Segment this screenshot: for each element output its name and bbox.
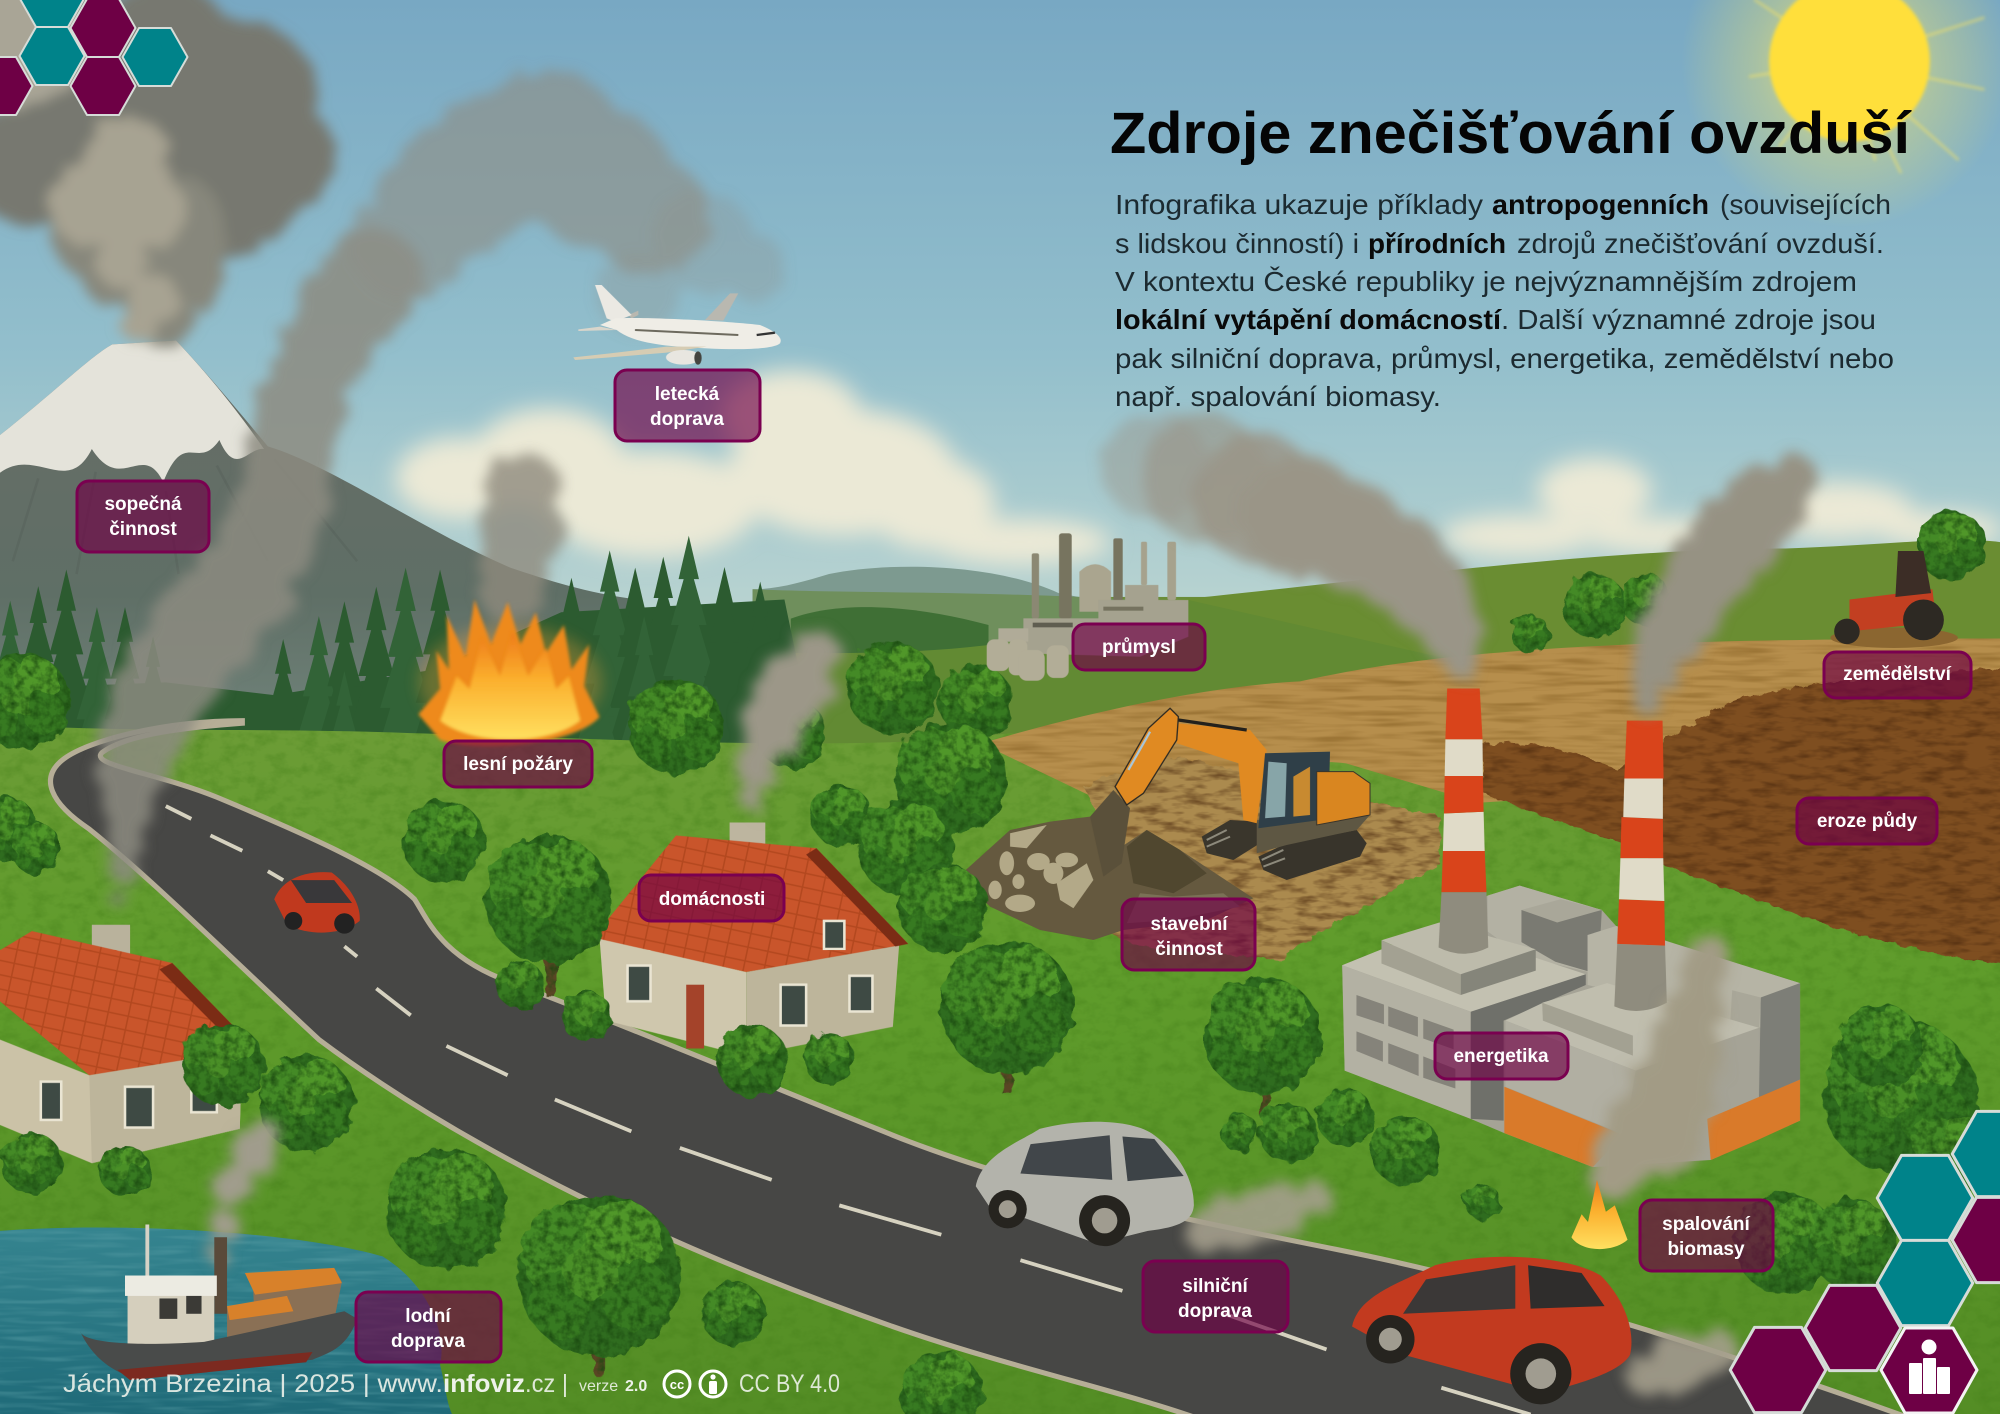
footer credit: CC BY 4.0 bbox=[739, 1370, 840, 1398]
lake bbox=[0, 1227, 453, 1414]
house: left bbox=[0, 925, 255, 1163]
volcano snow cap bbox=[0, 341, 264, 482]
right block back bbox=[1587, 926, 1800, 1028]
road bbox=[51, 721, 1939, 1414]
left block front wall bbox=[1342, 965, 1471, 1119]
refinery tank bbox=[1079, 564, 1111, 612]
silver car bbox=[976, 1122, 1194, 1246]
intro text: zdrojů znečišťování ovzduší. bbox=[1517, 228, 1884, 259]
label: lesní požáry: lesní požáry bbox=[463, 754, 573, 775]
label: stavební činnost: činnost bbox=[1155, 939, 1223, 960]
right block front wall bbox=[1505, 1021, 1636, 1135]
intro text: . Další významné zdroje jsou bbox=[1501, 304, 1876, 335]
excavator engine bbox=[1317, 772, 1370, 825]
label: eroze půdy bbox=[1797, 798, 1937, 844]
label: energetika bbox=[1435, 1033, 1568, 1079]
icon: creative commons bbox=[664, 1371, 726, 1397]
label: lodní doprava bbox=[356, 1292, 501, 1362]
orange base bbox=[1504, 1087, 1623, 1167]
ship hull bbox=[80, 1311, 357, 1378]
sky bbox=[0, 0, 2000, 791]
centre house chimney bbox=[730, 823, 765, 864]
left house roof bbox=[0, 931, 255, 1075]
excavator bbox=[1115, 708, 1370, 880]
right plinth bbox=[1542, 983, 1679, 1035]
label: spalování biomasy: biomasy bbox=[1667, 1239, 1745, 1260]
label: silniční doprava: silniční bbox=[1182, 1276, 1248, 1297]
sun bbox=[1681, 0, 2000, 227]
smoke: forest fire bbox=[477, 453, 564, 624]
left block side wall bbox=[1471, 974, 1586, 1121]
left block roof bbox=[1342, 926, 1586, 1012]
plane wing bbox=[573, 347, 707, 360]
centre house roof bbox=[593, 835, 908, 972]
excavator boom bbox=[1177, 723, 1267, 823]
intro text: přírodních bbox=[1368, 228, 1506, 259]
label: průmysl bbox=[1073, 624, 1205, 670]
distant hills bbox=[753, 567, 1314, 776]
airplane bbox=[573, 285, 781, 365]
label: zemědělství bbox=[1824, 652, 1971, 698]
centre house windows bbox=[628, 921, 872, 1026]
footer credit: .cz | bbox=[525, 1370, 568, 1398]
road lane markings bbox=[166, 806, 1531, 1414]
small biomass fire bbox=[1571, 1180, 1628, 1249]
smoke: long trail from left house bbox=[98, 70, 786, 908]
grass bbox=[0, 724, 2000, 1414]
back meadow bbox=[765, 599, 1467, 765]
label: sopečná činnost: činnost bbox=[109, 519, 177, 540]
intro text: antropogenních bbox=[1492, 189, 1709, 220]
intro text: pak silniční doprava, průmysl, energetika, zemědělství nebo bbox=[1115, 343, 1894, 374]
volcano bbox=[0, 341, 638, 765]
label: stavební činnost: stavební bbox=[1150, 914, 1228, 935]
intro text bbox=[1115, 189, 1894, 412]
excavator tracks bbox=[1202, 820, 1260, 860]
label: lesní požáry bbox=[444, 741, 592, 787]
plane fuselage bbox=[600, 318, 781, 349]
back block bbox=[1488, 886, 1602, 974]
back tree clusters bbox=[0, 511, 1987, 896]
construction ground bbox=[1073, 757, 1440, 960]
title: Zdroje znečišťování ovzduší bbox=[1110, 101, 1912, 166]
smoke: biomass bbox=[1589, 935, 1727, 1200]
right block roof bbox=[1505, 983, 1759, 1071]
rubble pile bbox=[958, 790, 1253, 940]
red car windows bbox=[1403, 1265, 1515, 1314]
plane rear wing bbox=[705, 293, 738, 321]
label: sopečná činnost: sopečná bbox=[104, 494, 182, 515]
smoke: ship bbox=[208, 1120, 281, 1265]
label: silniční doprava: doprava bbox=[1178, 1301, 1252, 1322]
label: průmysl: průmysl bbox=[1102, 637, 1176, 658]
left house windows bbox=[41, 1074, 217, 1128]
label: energetika: energetika bbox=[1453, 1046, 1549, 1067]
chimney left house bbox=[92, 925, 130, 963]
small red car bbox=[274, 872, 360, 934]
plane tail bbox=[595, 285, 632, 322]
intro text: lokální vytápění domácností bbox=[1115, 304, 1502, 335]
icon: attribution person bbox=[709, 1374, 717, 1394]
red car bbox=[1352, 1257, 1631, 1404]
intro text: s lidskou činností) i bbox=[1115, 228, 1359, 259]
label: letecká doprava bbox=[615, 370, 760, 441]
smoke: volcano plume bbox=[0, 0, 337, 346]
refinery columns bbox=[1032, 533, 1176, 618]
footer credit: infoviz bbox=[443, 1370, 525, 1398]
volcano ridges bbox=[13, 459, 357, 574]
clouds bbox=[395, 370, 2000, 565]
label: domácnosti bbox=[639, 875, 784, 921]
storage tanks bbox=[987, 639, 1069, 681]
centre house door bbox=[686, 985, 704, 1048]
factory power plant bbox=[1342, 689, 1800, 1167]
green hill on right bbox=[1020, 540, 2000, 791]
smoke: left chimney bbox=[1101, 412, 1482, 680]
excavator cab bbox=[1258, 752, 1330, 828]
bottom-right hexagons bbox=[1730, 1111, 2000, 1413]
intro text: (souvisejících bbox=[1720, 189, 1891, 220]
top-left hexagons bbox=[0, 0, 188, 115]
fields bbox=[986, 639, 2000, 974]
label: spalování biomasy bbox=[1640, 1200, 1773, 1271]
label: silniční doprava bbox=[1143, 1261, 1288, 1332]
house: centre bbox=[593, 823, 908, 1056]
excavator stick bbox=[1115, 708, 1178, 805]
chimney right bbox=[1614, 721, 1667, 1011]
ploughed field bbox=[986, 639, 2000, 828]
plane engine bbox=[666, 350, 701, 365]
left plinth bbox=[1381, 922, 1536, 974]
right block side wall bbox=[1759, 983, 1800, 1097]
industry bbox=[958, 533, 1440, 960]
intro text: např. spalování biomasy. bbox=[1115, 381, 1441, 412]
excavator base bbox=[1257, 815, 1370, 853]
windows bbox=[1356, 995, 1455, 1089]
factory silhouette bbox=[1342, 886, 1800, 1167]
label: lodní doprava: lodní bbox=[405, 1306, 451, 1327]
label: eroze půdy: eroze půdy bbox=[1817, 811, 1918, 832]
eroded soil mound bbox=[1482, 664, 2000, 974]
label: sopečná činnost bbox=[77, 481, 209, 552]
intro text: V kontextu České republiky je nejvýznamnějším zdrojem bbox=[1115, 266, 1857, 297]
footer credit: 2.0 bbox=[625, 1378, 647, 1395]
ship cargo bbox=[253, 1268, 342, 1327]
smoke: cars bbox=[1185, 1181, 1739, 1395]
silver car windows bbox=[1020, 1135, 1112, 1180]
footer credit bbox=[63, 1370, 840, 1398]
label: letecká doprava: doprava bbox=[650, 409, 724, 430]
forest bbox=[0, 536, 816, 830]
smoke: centre house bbox=[735, 631, 842, 810]
tree trunks bbox=[551, 944, 1265, 1375]
label: spalování biomasy: spalování bbox=[1662, 1214, 1751, 1235]
footer credit: cc bbox=[670, 1377, 684, 1392]
label: zemědělství: zemědělství bbox=[1843, 664, 1952, 685]
trees and bushes bbox=[1, 835, 1993, 1414]
footer credit: verze bbox=[579, 1378, 618, 1395]
footer credit: Jáchym Brzezina | 2025 | www. bbox=[63, 1370, 443, 1398]
label: domácnosti: domácnosti bbox=[659, 889, 765, 910]
icon: statistics hexagon bbox=[1881, 1328, 1977, 1413]
label: lodní doprava: doprava bbox=[391, 1331, 465, 1352]
label: letecká doprava: letecká bbox=[655, 384, 720, 405]
chimney left bbox=[1439, 689, 1488, 954]
intro text: Infografika ukazuje příklady bbox=[1115, 189, 1483, 220]
refinery buildings bbox=[1023, 585, 1188, 657]
ship bbox=[80, 1224, 357, 1380]
label: stavební činnost bbox=[1122, 899, 1255, 970]
ship cabin bbox=[128, 1283, 214, 1344]
smoke: right chimney bbox=[1629, 454, 1820, 714]
tractor bbox=[1830, 551, 1958, 648]
forest fire bbox=[418, 599, 602, 746]
